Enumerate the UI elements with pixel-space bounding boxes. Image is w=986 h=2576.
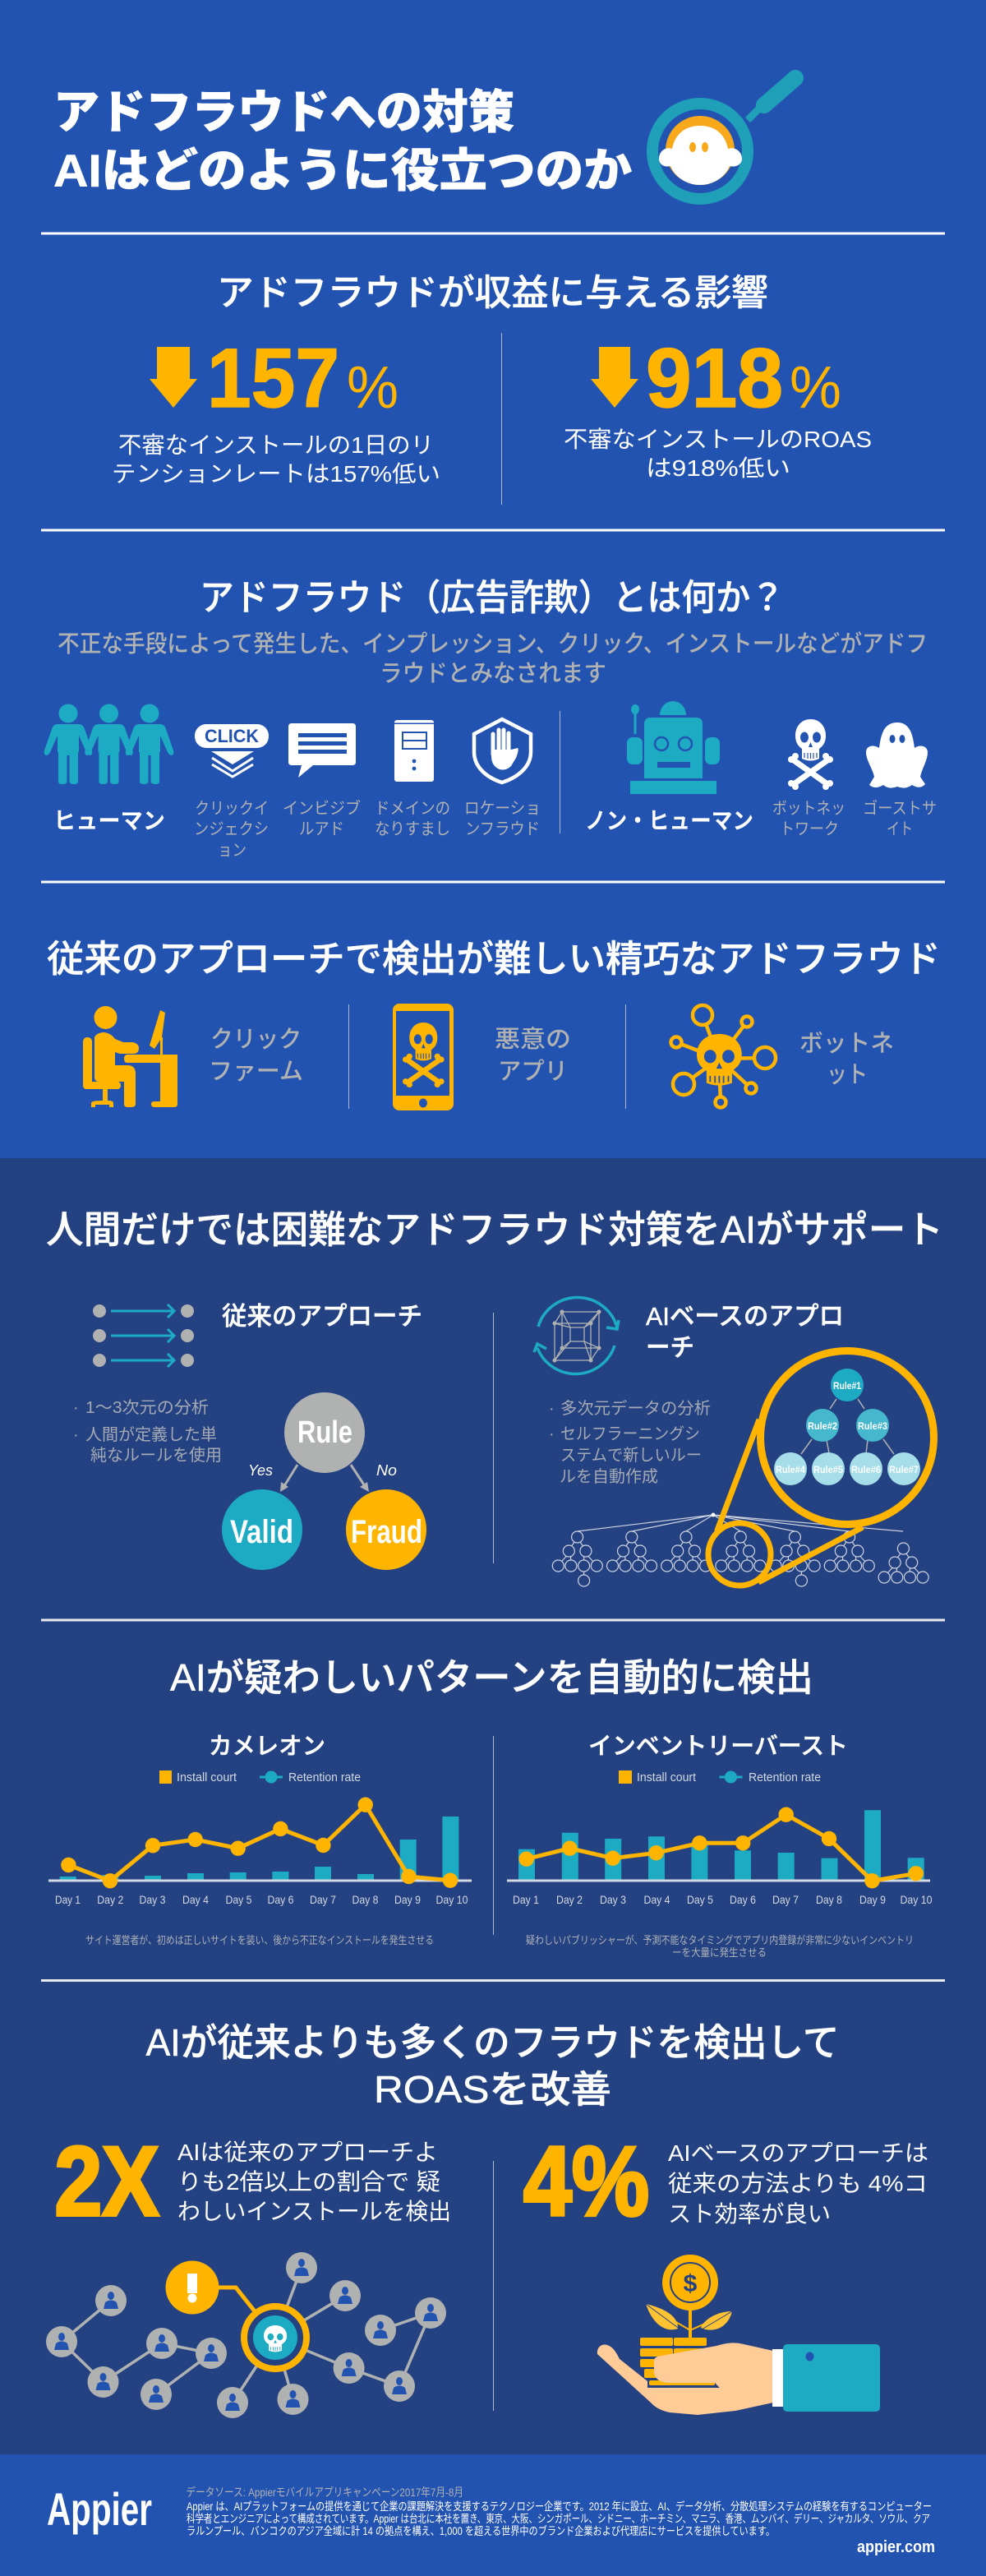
label: botnet <box>799 1031 894 1088</box>
title <box>53 86 632 196</box>
label: click injection: ョン <box>218 842 246 860</box>
text: traditional bullets: · <box>73 1426 79 1444</box>
icon: malicious app phone <box>393 1004 454 1110</box>
label: click farm: ファーム <box>209 1059 303 1085</box>
text: ROAS: は918%低い <box>646 455 790 481</box>
text: data source: データソース: Appierモバイルアプリキャンペーン2017年7月-8月 <box>186 2486 463 2499</box>
panel: improving ROAS <box>46 2021 928 2418</box>
icon: botnet skull <box>670 1005 776 1108</box>
text: traditional bullets: · <box>73 1399 79 1417</box>
axis labels: Day 4 <box>644 1893 670 1906</box>
label: human: ヒューマン <box>53 808 165 833</box>
text: definition: 不正な手段によって発生した、インプレッション、クリック、インストールなどがアドフ <box>58 630 928 658</box>
stat: 918 percent: % <box>790 355 841 421</box>
label: domain spoofing: ドメインの <box>375 800 450 818</box>
chart: rule tree: Fraud <box>351 1514 422 1550</box>
axis labels: Day 6 <box>268 1893 294 1906</box>
label: ghost site <box>863 799 937 838</box>
icon: human group <box>44 704 173 784</box>
heading: sophisticated ad fraud: 従来のアプローチで検出が難しい精巧なアドフラウド <box>47 938 941 980</box>
axis labels: Day 7 <box>310 1893 336 1906</box>
label: botnet: ット <box>827 1062 868 1088</box>
text: traditional bullets: 1〜3次元の分析 <box>85 1398 209 1417</box>
callout: magnified tree: Rule#3 <box>858 1420 887 1432</box>
icon: invisible ad bubble <box>288 723 356 778</box>
label: click injection <box>194 799 269 860</box>
label: click farm <box>209 1027 303 1085</box>
callout: magnified tree: Rule#4 <box>776 1464 805 1475</box>
label: invisible ad: インビジブ <box>283 798 361 818</box>
label: location fraud <box>464 800 541 838</box>
text: definition <box>58 630 928 687</box>
label: bot network: ボットネッ <box>772 799 845 818</box>
axis labels <box>55 1893 468 1906</box>
text: 2X description: わしいインストールを検出 <box>177 2199 451 2224</box>
text: 4 percent description: AIベースのアプローチは <box>668 2140 928 2166</box>
text: traditional bullets: 人間が定義した単 <box>85 1425 217 1444</box>
legend: Retention rate <box>288 1770 361 1784</box>
label: botnet: ボットネ <box>799 1031 894 1057</box>
axis labels: Day 4 <box>182 1893 209 1906</box>
chart: rule tree: Valid <box>230 1514 293 1550</box>
chart: rule tree <box>222 1392 426 1570</box>
line series <box>61 1797 458 1889</box>
axis labels: Day 1 <box>55 1893 81 1906</box>
axis labels: Day 2 <box>556 1893 583 1906</box>
text: about Appier: ラルンプール、バンコクのアジア全域に計 14 の拠点を構え、1,000 を超える世界中のブランド企業および代理店にサービスを提供しています。 <box>187 2524 775 2537</box>
callout: magnified tree: Rule#5 <box>813 1464 843 1475</box>
callout: magnified tree: Rule#7 <box>889 1464 919 1475</box>
heading: improving ROAS <box>146 2021 840 2111</box>
text: retention rate <box>112 432 440 487</box>
text: 4 percent description: スト効率が良い <box>668 2201 831 2227</box>
heading: traditional approach: 従来のアプローチ <box>222 1302 422 1331</box>
callout: magnified tree: Rule#2 <box>808 1420 837 1432</box>
label: click farm: クリック <box>210 1027 302 1053</box>
text: retention rate: テンションレートは157%低い <box>112 461 440 487</box>
label: malicious app: アプリ <box>498 1058 568 1085</box>
text: 4 percent description: 従来の方法よりも 4%コ <box>668 2171 928 2196</box>
title: AIはどのように役立つのか <box>53 145 632 196</box>
legend: Install court <box>177 1770 237 1784</box>
panel: footer <box>47 2483 935 2556</box>
heading: pattern detection: AIが疑わしいパターンを自動的に検出 <box>170 1656 813 1699</box>
label: invisible ad <box>283 798 361 838</box>
axis labels: Day 10 <box>435 1893 468 1906</box>
label: malicious app: 悪意の <box>495 1026 571 1053</box>
heading: AI based approach: AIベースのアプロ <box>646 1302 844 1331</box>
panel: revenue impact <box>112 273 872 487</box>
illustration: hand with coins and plant <box>597 2255 880 2415</box>
text: AI bullets: 多次元データの分析 <box>560 1399 711 1418</box>
axis labels: Day 9 <box>394 1893 421 1906</box>
chart: rule tree: Yes <box>248 1462 273 1479</box>
caption: chameleon: サイト運営者が、初めは正しいサイトを装い、後から不正なインストールを発生させる <box>85 1934 434 1946</box>
text: AI bullets: ステムで新しいルー <box>560 1446 702 1465</box>
text: definition: ラウドとみなされます <box>380 661 606 687</box>
icon: robot <box>627 701 720 794</box>
icon: click injection: CLICK <box>205 726 259 746</box>
text: about Appier <box>187 2500 932 2537</box>
caption: inventory burst <box>526 1934 914 1959</box>
label: bot network <box>772 799 845 838</box>
text: traditional bullets <box>73 1398 222 1465</box>
panel: what is ad fraud <box>44 578 937 860</box>
text: 4 percent description <box>668 2140 928 2227</box>
legend <box>619 1770 821 1784</box>
callout: magnified tree <box>708 1351 933 1586</box>
axis labels: Day 3 <box>600 1893 626 1906</box>
bars <box>60 1817 458 1880</box>
label: domain spoofing <box>375 800 450 838</box>
axis labels: Day 9 <box>859 1893 886 1906</box>
title: アドフラウドへの対策 <box>53 86 514 138</box>
heading: AI based approach <box>646 1302 844 1362</box>
chart: inventory burst <box>507 1733 933 1959</box>
text: traditional bullets: 純なルールを使用 <box>90 1446 222 1465</box>
stat: 157 percent <box>150 331 399 425</box>
panel: pattern detection <box>48 1656 933 1959</box>
stat: 157 percent: 157 <box>207 331 339 425</box>
chart: rule tree: Rule <box>297 1415 352 1450</box>
icon: ghost site <box>866 722 928 788</box>
stat: 4 percent: 4% <box>523 2126 649 2237</box>
axis labels: Day 10 <box>901 1893 933 1906</box>
legend: Retention rate <box>749 1770 821 1784</box>
axis labels: Day 5 <box>687 1893 713 1906</box>
stat: 2X: 2X <box>54 2126 159 2237</box>
illustration: fraud network <box>46 2252 446 2418</box>
heading: improving ROAS: ROASを改善 <box>374 2068 611 2111</box>
heading: AI support: 人間だけでは困難なアドフラウド対策をAIがサポート <box>46 1208 943 1251</box>
axis labels: Day 6 <box>730 1893 756 1906</box>
legend <box>159 1770 361 1784</box>
background: top blue <box>0 0 986 1158</box>
chart title: inventory burst: インベントリーバースト <box>588 1733 848 1760</box>
axis labels: Day 8 <box>352 1893 379 1906</box>
callout: magnified tree: Rule#1 <box>833 1380 861 1392</box>
heading: improving ROAS: AIが従来よりも多くのフラウドを検出して <box>146 2021 840 2064</box>
axis labels: Day 2 <box>97 1893 123 1906</box>
text: retention rate: 不審なインストールの1日のリ <box>118 432 434 458</box>
label: bot network: トワーク <box>780 819 839 838</box>
icon: server domain spoofing <box>394 720 434 782</box>
label: ghost site: ゴーストサ <box>863 799 937 818</box>
icon: magnifier with ghost <box>652 78 795 199</box>
chart: forest of decision trees <box>552 1512 928 1586</box>
panel: header <box>53 78 795 199</box>
label: ghost site: イト <box>887 820 913 838</box>
text: AI bullets: · <box>549 1400 555 1418</box>
bars <box>518 1810 924 1880</box>
axis labels: Day 7 <box>772 1893 799 1906</box>
axis labels: Day 3 <box>140 1893 166 1906</box>
line series <box>518 1807 924 1889</box>
label: click injection: ンジェクシ <box>194 819 269 838</box>
label: malicious app <box>495 1026 571 1085</box>
logo: Appier: Appier <box>47 2483 152 2535</box>
heading: revenue impact: アドフラウドが収益に与える影響 <box>217 273 768 313</box>
text: AI bullets: セルフラーニングシ <box>560 1424 700 1443</box>
icon: skull botnet <box>788 719 833 790</box>
stat: 918 percent <box>591 331 841 425</box>
text: appier.com: appier.com <box>857 2538 935 2556</box>
text: AI bullets: ルを自動作成 <box>560 1467 658 1486</box>
caption: inventory burst: ーを大量に発生させる <box>672 1946 767 1959</box>
icon: click injection <box>195 724 269 777</box>
label: location fraud: ロケーショ <box>464 800 541 818</box>
text: ROAS <box>564 427 872 481</box>
text: 2X description <box>177 2140 451 2224</box>
label: domain spoofing: なりすまし <box>375 820 450 838</box>
axis labels: Day 8 <box>816 1893 842 1906</box>
axis labels <box>513 1893 933 1906</box>
heading: AI based approach: ーチ <box>646 1333 694 1362</box>
background: footer blue <box>0 2454 986 2576</box>
stat: 157 percent: % <box>347 355 399 421</box>
label: click injection: クリックイ <box>195 799 269 818</box>
text: AI bullets: · <box>549 1425 555 1443</box>
axis labels: Day 1 <box>513 1893 539 1906</box>
chart: rule tree: No <box>376 1462 397 1479</box>
caption: inventory burst: 疑わしいパブリッシャーが、予測不能なタイミングでアプリ内登録が非常に少ないインベントリ <box>526 1934 914 1946</box>
legend: Install court <box>637 1770 697 1784</box>
icon: click farm worker <box>83 1006 177 1107</box>
icon: traditional approach arrows <box>93 1304 194 1367</box>
chart title: chameleon: カメレオン <box>209 1733 325 1760</box>
label: non-human: ノン・ヒューマン <box>585 808 753 833</box>
background: dark navy <box>0 1158 986 2454</box>
label: invisible ad: ルアド <box>299 820 344 838</box>
illustration: hand with coins and plant: $ <box>684 2270 698 2297</box>
panel: AI support <box>46 1208 943 1586</box>
label: location fraud: ンフラウド <box>465 820 540 838</box>
icon: shield location fraud <box>474 719 531 782</box>
callout: magnified tree: Rule#6 <box>851 1464 881 1475</box>
text: 2X description: りも2倍以上の割合で 疑 <box>177 2169 440 2195</box>
panel: sophisticated ad fraud <box>47 938 941 1110</box>
axis labels: Day 5 <box>225 1893 252 1906</box>
text: AI bullets <box>549 1399 711 1486</box>
text: ROAS: 不審なインストールのROAS <box>564 427 872 452</box>
icon: hypercube cycle <box>534 1297 619 1374</box>
stat: 918 percent: 918 <box>646 331 783 425</box>
heading: what is ad fraud: アドフラウド（広告詐欺）とは何か？ <box>200 578 785 618</box>
text: 2X description: AIは従来のアプローチよ <box>177 2140 438 2165</box>
chart: chameleon <box>48 1733 472 1946</box>
